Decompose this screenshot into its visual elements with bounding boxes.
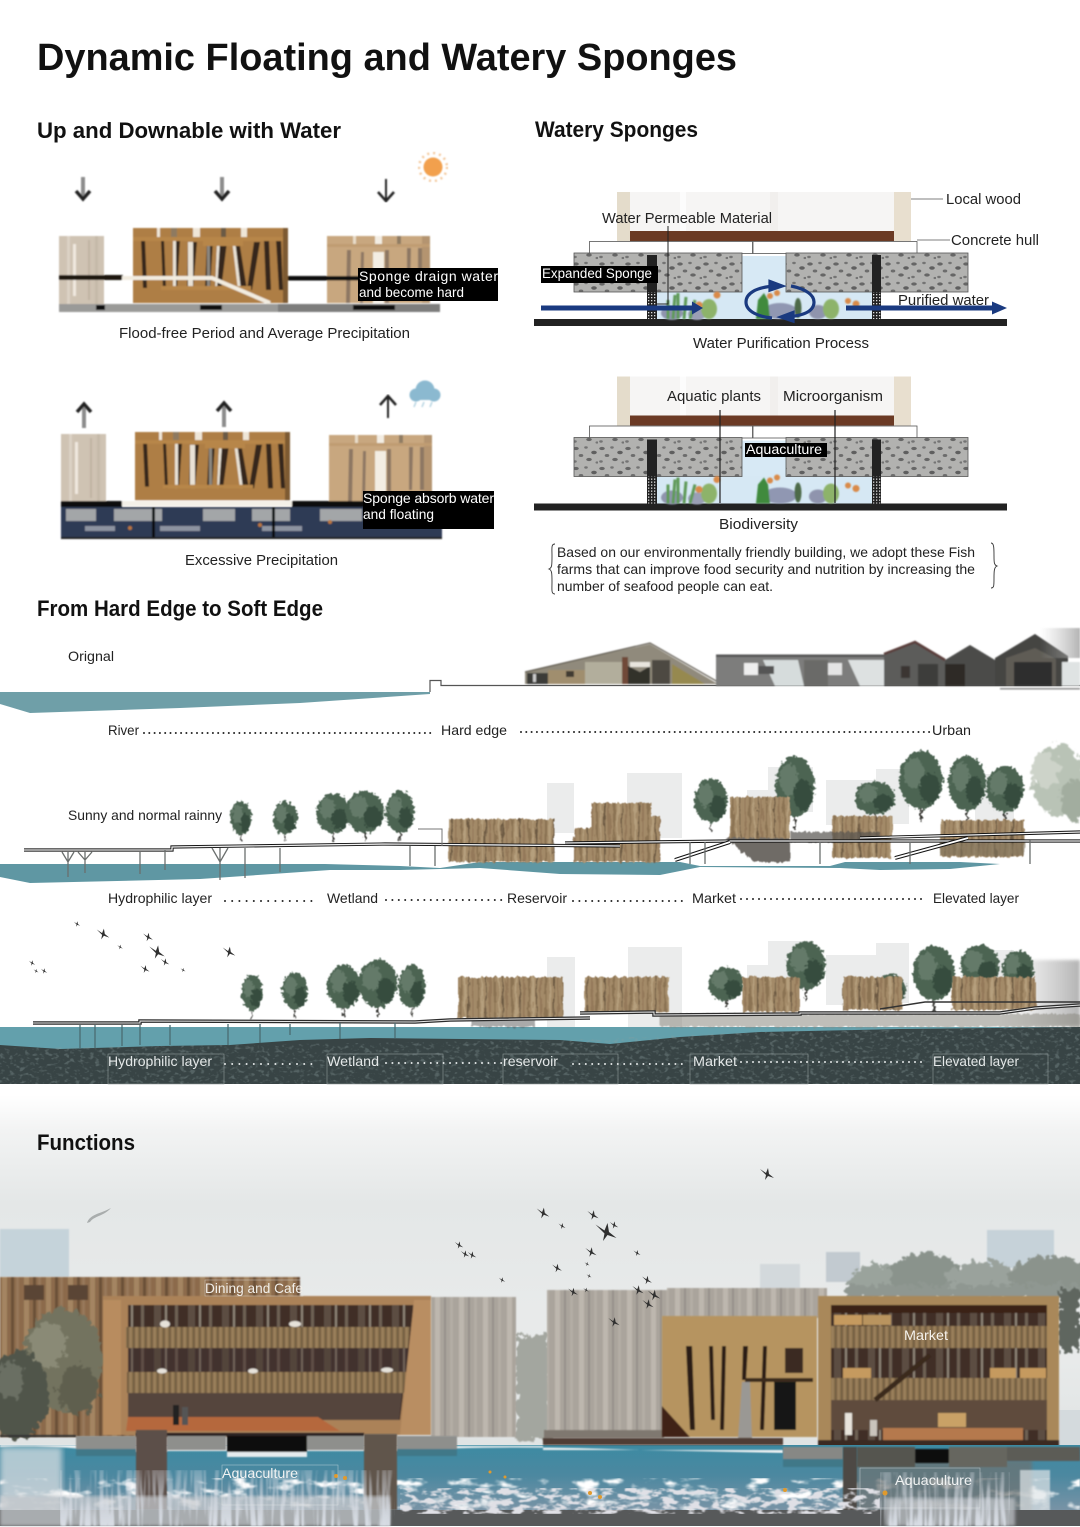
panel: flood section	[0, 921, 1080, 1084]
water	[0, 862, 1000, 883]
arrow: inflow	[541, 302, 703, 314]
floodwater	[0, 1027, 1080, 1057]
callout: sponge absorb: and floating	[363, 506, 434, 522]
heading: hard to soft edge: From Hard Edge to Soft Edge	[37, 596, 323, 621]
thin white label frames	[108, 1054, 1048, 1084]
middle back timber building	[544, 1288, 827, 1438]
pale reed bed right	[885, 1498, 1015, 1526]
caption: Biodiversity	[719, 517, 799, 533]
text block: fish farms: farms that can improve food security and nutrition by increasing the	[557, 561, 975, 577]
arrows: moving down	[76, 177, 394, 201]
dark riverbed	[0, 1027, 1080, 1084]
reeds	[60, 1470, 1010, 1526]
front timber curtain building	[662, 1316, 817, 1440]
icon: sun	[419, 153, 447, 181]
background forest right	[516, 1253, 1080, 1440]
labels and dots: river to urban: Hard edge	[441, 722, 507, 738]
label: Orignal	[68, 648, 114, 664]
grey timber building behind	[431, 1297, 516, 1437]
river water	[0, 692, 430, 713]
arrow: purified water outflow	[846, 302, 1007, 314]
trees	[242, 941, 1034, 1018]
labels and dots: flood layers	[108, 1053, 1019, 1069]
reef foam band	[0, 1478, 1080, 1514]
labels and dots: flood layers: Market	[693, 1053, 737, 1069]
big tree at right	[1031, 744, 1080, 822]
flock of birds	[29, 921, 235, 974]
label: Sunny and normal rainny	[68, 807, 222, 823]
section diagram: floating unit	[534, 192, 1007, 326]
deck structure and ramps	[24, 829, 1080, 880]
mist on right	[1000, 960, 1080, 1026]
arrows: moving up	[77, 396, 396, 428]
labels and dots: river to urban: River	[108, 722, 139, 738]
labels and dots: layers: Hydrophilic layer	[108, 890, 212, 906]
label: aquaculture left: Aquaculture	[222, 1465, 298, 1481]
heading: functions: Functions	[37, 1130, 135, 1155]
arrow: circulation loop	[746, 282, 814, 321]
callout: sponge drain: and become hard	[359, 284, 464, 300]
callout: sponge absorb	[363, 490, 494, 529]
section diagram: floating unit	[534, 376, 1007, 510]
label: Aquatic plants	[667, 389, 761, 405]
title: Dynamic Floating and Watery Sponges	[37, 37, 737, 79]
leader: local wood	[911, 198, 943, 200]
labels and dots: layers: Market	[692, 890, 736, 906]
coral and rocks	[400, 1488, 880, 1514]
caption: Water Purification Process	[693, 336, 869, 352]
distant towers	[547, 767, 1014, 838]
flock over the river	[455, 1168, 774, 1327]
far right water glimpse	[1059, 1410, 1080, 1450]
dining and cafe building	[103, 1296, 431, 1435]
timber pavilions	[448, 797, 1025, 862]
sponge hull boxes	[0, 1433, 1080, 1467]
labels and dots: flood layers: reservoir	[503, 1053, 558, 1069]
old riverside houses	[525, 628, 1080, 690]
labels and dots: river to urban	[108, 722, 971, 738]
labels and dots: layers: Reservoir	[507, 890, 567, 906]
panel: functions perspective	[0, 1095, 1080, 1526]
label: Purified water	[898, 293, 989, 309]
callout: aquaculture: Aquaculture	[746, 442, 822, 457]
water	[0, 1445, 1080, 1513]
text block: fish farms	[549, 543, 997, 594]
pale sponge glimpse at right	[1020, 1470, 1050, 1515]
callout: sponge absorb: Sponge absorb water	[363, 490, 494, 506]
left background building	[0, 1277, 300, 1437]
panel: excessive precipitation	[61, 380, 494, 569]
text block: fish farms: Based on our environmentally friendly building, we adopt these Fish	[557, 544, 975, 560]
heading: up and downable: Up and Downable with Water	[37, 118, 341, 143]
labels and dots: layers	[108, 890, 1019, 906]
market building	[818, 1296, 1059, 1448]
callout: expanded sponge: Expanded Sponge	[542, 266, 652, 281]
small fish	[334, 1470, 888, 1499]
floating buildings raised	[61, 432, 442, 539]
label: Concrete hull	[951, 233, 1039, 249]
wave crest	[0, 1445, 783, 1453]
gull	[87, 1208, 111, 1223]
panel: biodiversity	[534, 376, 1007, 533]
trees	[230, 751, 1024, 842]
floating buildings	[59, 228, 440, 312]
distant towers	[0, 1229, 1054, 1289]
pale reed bed left	[0, 1496, 390, 1526]
hard edge wall	[430, 680, 1080, 692]
labels and dots: river to urban: Urban	[932, 722, 971, 738]
deck structure	[33, 1002, 1080, 1049]
labels and dots: layers: Elevated layer	[933, 890, 1019, 906]
seabed	[0, 1510, 1080, 1526]
label: Microorganism	[783, 389, 883, 405]
sky	[0, 1095, 1080, 1455]
left trees	[0, 1308, 102, 1439]
text block: fish farms: number of seafood people can eat.	[557, 578, 773, 594]
panel: original section	[0, 628, 1080, 738]
callout: sponge drain: Sponge draign water	[359, 268, 498, 284]
panel: water purification	[534, 192, 1039, 352]
distant towers	[547, 941, 1014, 1032]
labels and dots: flood layers: Hydrophilic layer	[108, 1053, 212, 1069]
callout: sponge drain	[358, 268, 498, 301]
caption: Flood-free Period and Average Precipitation	[119, 326, 410, 342]
heading: watery sponges: Watery Sponges	[535, 117, 698, 142]
label: Local wood	[946, 192, 1021, 208]
timber pavilions	[458, 977, 1080, 1027]
labels and dots: layers: Wetland	[327, 890, 378, 906]
labels and dots: flood layers: Wetland	[327, 1053, 379, 1069]
panel: sunny and normal rainy section	[0, 744, 1080, 906]
icon: rain cloud	[410, 380, 440, 407]
labels and dots: flood layers: Elevated layer	[933, 1053, 1019, 1069]
leaders: aquatic plants and microorganism	[720, 410, 835, 503]
left shoreline foam	[0, 1447, 62, 1525]
texture on riverbed	[0, 1027, 1080, 1084]
leader: concrete hull	[917, 239, 950, 241]
label: Water Permeable Material	[602, 211, 772, 227]
thin label frames	[205, 1280, 980, 1508]
label: dining and cafe: Dining and Cafe	[205, 1280, 303, 1296]
leader: water permeable material	[657, 226, 668, 304]
caption: Excessive Precipitation	[185, 553, 338, 569]
panel: flood-free period	[59, 153, 498, 342]
concrete piers	[136, 1430, 857, 1513]
label: aquaculture right: Aquaculture	[895, 1472, 972, 1488]
label: market: Market	[904, 1327, 948, 1343]
shadowed right water	[857, 1460, 1032, 1520]
